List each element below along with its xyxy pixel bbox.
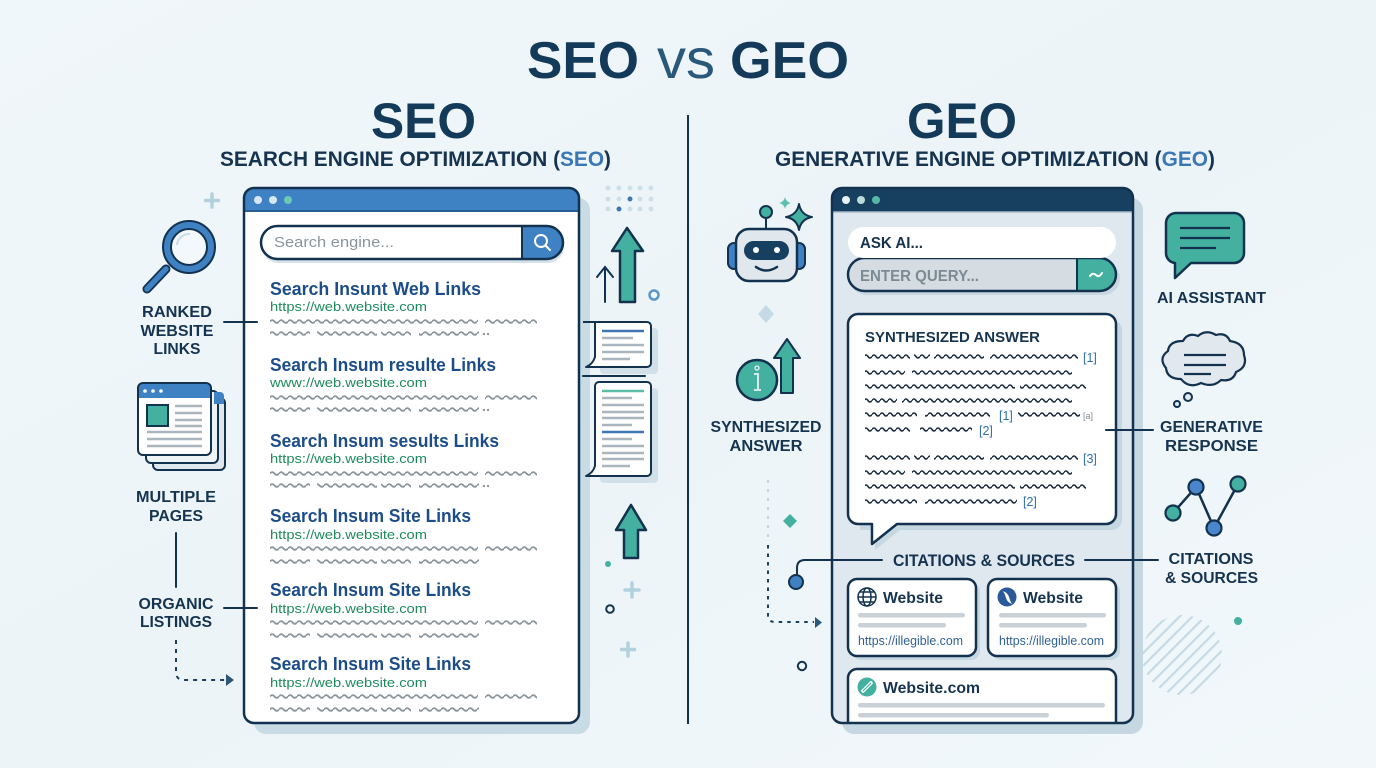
answer paragraph 2: [3] (1083, 452, 1097, 466)
label: multiple pages: MULTIPLE (136, 489, 216, 506)
connector line above document (583, 375, 645, 377)
infographic canvas (137, 42, 1266, 734)
icon: plus decoration (206, 194, 218, 207)
result 1: https://web.website.com (270, 299, 427, 314)
label: generative response: GENERATIVE (1160, 419, 1263, 436)
result 4: Search Insum Site Links (270, 506, 471, 526)
icon: snippet document (583, 322, 658, 374)
citation card 1: Website (883, 590, 943, 607)
icon: robot (728, 197, 812, 281)
icon: citation network (1166, 476, 1246, 536)
citation card 2: Website (1023, 590, 1083, 607)
result 5: https://web.website.com (270, 601, 427, 616)
result 3: https://web.website.com (270, 451, 427, 466)
center divider (687, 115, 689, 724)
citation card 1 (848, 579, 980, 660)
result 6: Search Insum Site Links (270, 654, 471, 674)
decorations: SEO lower right (605, 561, 639, 656)
result 3 (270, 431, 537, 488)
browser frame outline (832, 188, 1133, 723)
connector: citations left (789, 560, 882, 589)
heading: SEO: SEO (371, 93, 476, 149)
arrow: dotted to listings (176, 640, 234, 686)
icon: multiple pages (138, 383, 225, 470)
ask AI pill (848, 227, 1116, 258)
answer paragraph 1: [1] (999, 409, 1013, 423)
icon: ring dot (650, 290, 658, 300)
title: GEO (730, 32, 849, 90)
icon: generative cloud (1162, 332, 1245, 407)
result 5: Search Insum Site Links (270, 580, 471, 600)
result 5 (270, 580, 537, 638)
icon: info with arrow (737, 339, 800, 400)
citation card 3 (846, 668, 1118, 722)
answer paragraph 1: [a] (1083, 411, 1093, 421)
citation card 2: https://illegible.com (999, 633, 1104, 648)
result 2: Search Insum resulte Links (270, 355, 496, 375)
result 1 (270, 279, 537, 336)
label: AI assistant: AI ASSISTANT (1157, 290, 1266, 307)
title: SEO (527, 32, 639, 90)
label: citations and sources: & SOURCES (1165, 570, 1258, 587)
search bar: Search engine... (274, 234, 394, 251)
icon: diamond decoration (758, 305, 774, 323)
citation card 1: https://illegible.com (858, 633, 963, 648)
citation card 2 (988, 579, 1120, 660)
connector: citations right (1085, 559, 1158, 561)
answer paragraph 2: [2] (1023, 495, 1037, 509)
label: ranked website links: LINKS (154, 341, 201, 358)
result 2 (269, 355, 537, 412)
icon: ring (798, 662, 806, 670)
answer paragraph 1 (865, 351, 1097, 438)
icon: teal dot (1234, 617, 1242, 625)
answer paragraph 2 (865, 452, 1097, 509)
search bar (261, 226, 564, 263)
heading: GEO: GEO (907, 93, 1017, 149)
arrow: dotted to citations (768, 480, 822, 628)
label: generative response: RESPONSE (1165, 438, 1258, 455)
connector: ranked links (224, 321, 257, 323)
label: generative response (1160, 419, 1263, 455)
subheading: generative engine optimization: GENERATIVE ENGINE OPTIMIZATION (GEO) (775, 148, 1215, 171)
synthesized answer bubble (848, 314, 1122, 550)
label: citations and sources (1165, 551, 1258, 587)
label: multiple pages (136, 489, 216, 525)
result 6 (270, 654, 537, 712)
citation card 3: Website.com (883, 680, 980, 697)
title: vs (657, 27, 715, 90)
result 4 (270, 506, 537, 564)
connector: organic listings (224, 607, 257, 609)
label: organic listings (138, 596, 214, 631)
icon: magnifying glass (147, 221, 215, 289)
ask AI pill: ASK AI... (860, 235, 923, 252)
result 2: www://web.website.com (269, 375, 427, 390)
label: synthesized answer: ANSWER (730, 438, 803, 455)
query input (848, 258, 1120, 295)
arrow: teal up lower (616, 505, 646, 558)
label: ranked website links: RANKED (142, 304, 212, 321)
icon: teal diamond (783, 514, 797, 528)
answer paragraph 1: [1] (1083, 351, 1097, 365)
answer paragraph 1: [2] (979, 424, 993, 438)
label: organic listings: ORGANIC (138, 596, 214, 613)
title (527, 27, 849, 90)
connector: pages to listings (175, 533, 177, 587)
label: organic listings: LISTINGS (140, 614, 212, 631)
panel: SEO browser (244, 188, 590, 734)
query input: ENTER QUERY... (860, 268, 979, 285)
synthesized answer bubble: SYNTHESIZED ANSWER (865, 329, 1040, 346)
subheading: search engine optimization: SEARCH ENGINE OPTIMIZATION (SEO) (220, 148, 611, 171)
result 4: https://web.website.com (270, 527, 427, 542)
heading: citations and sources: CITATIONS & SOURCES (893, 552, 1075, 570)
result 1: Search Insunt Web Links (270, 279, 481, 299)
label: citations and sources: CITATIONS (1168, 551, 1254, 568)
browser dots (842, 196, 880, 204)
icon: AI assistant bubble (1166, 213, 1244, 278)
connector: generative response (1106, 429, 1153, 431)
arrow: small thin up (597, 267, 613, 302)
label: multiple pages: PAGES (149, 508, 203, 525)
result 3: Search Insum sesults Links (270, 431, 499, 451)
label: synthesized answer: SYNTHESIZED (710, 419, 822, 436)
label: ranked website links (140, 304, 214, 358)
browser dots (254, 196, 292, 204)
dot grid decoration (606, 186, 654, 212)
hatched circle decoration (1142, 615, 1222, 695)
panel: GEO browser (832, 188, 1143, 739)
label: synthesized answer (710, 419, 822, 455)
label: ranked website links: WEBSITE (140, 323, 214, 340)
result 6: https://web.website.com (270, 675, 427, 690)
arrow: large teal up (612, 228, 643, 302)
icon: long document (586, 382, 658, 483)
